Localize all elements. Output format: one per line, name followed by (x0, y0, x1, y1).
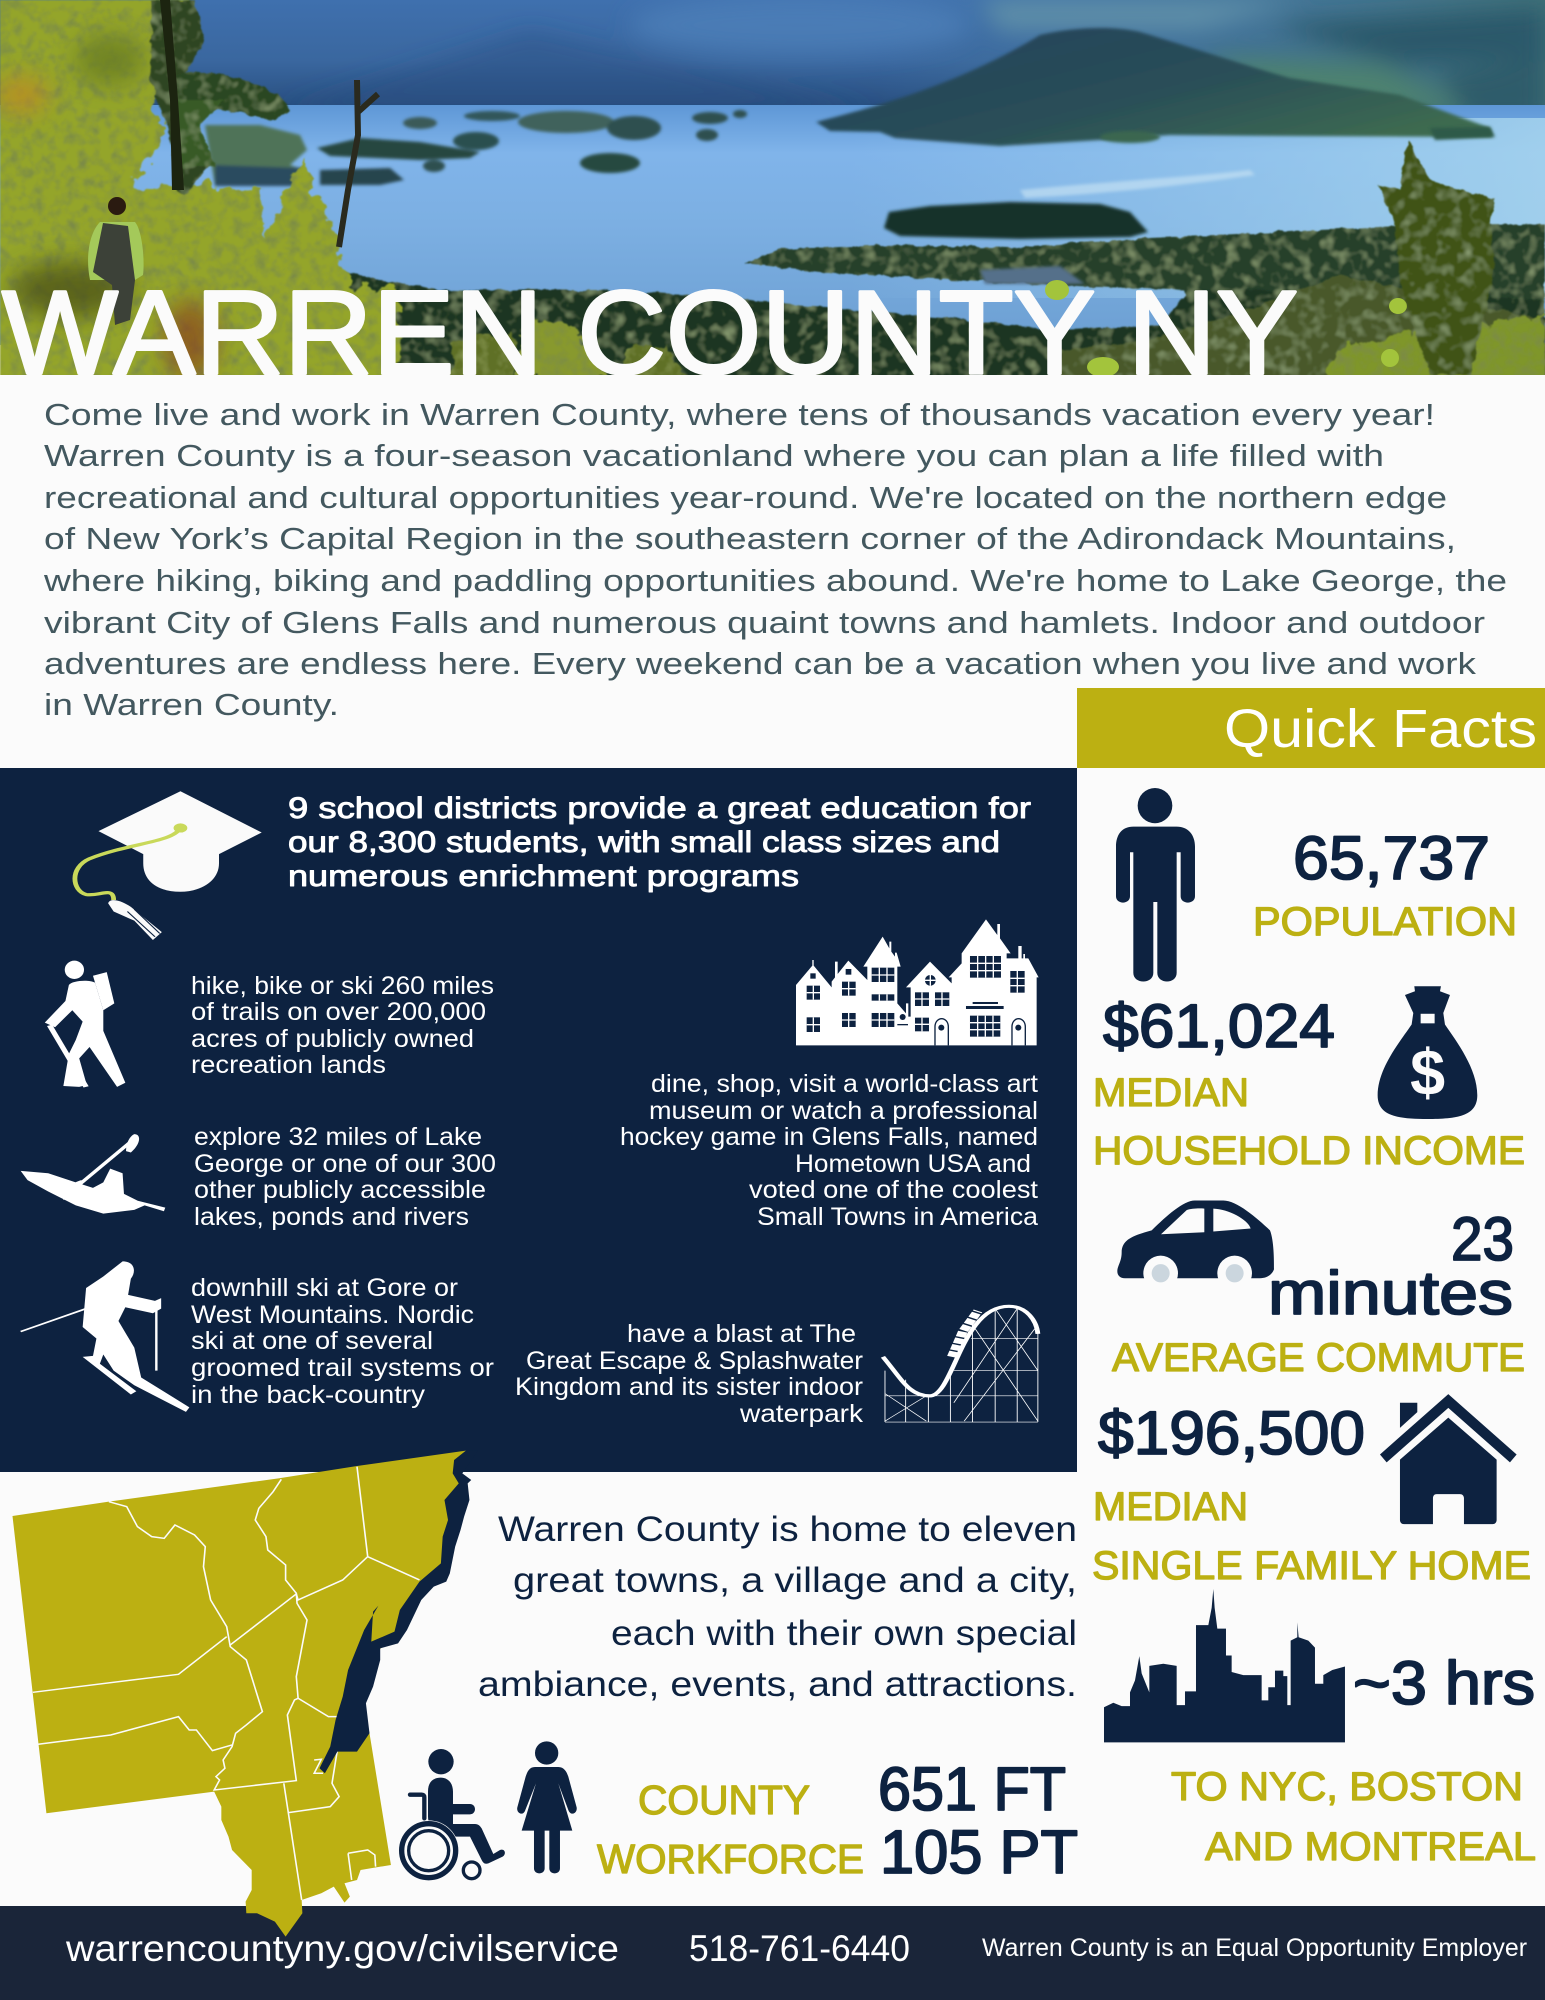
hiking text: recreation lands (191, 1051, 386, 1079)
hero photo: lake and mountains (0, 0, 1545, 400)
towns text: Warren County is home to eleven (498, 1510, 1077, 1549)
education text: 9 school districts provide a great education for (288, 792, 1031, 825)
map lake george and east border (320, 1450, 478, 1773)
towns text (478, 1510, 1077, 1704)
skiing text: ski at one of several (191, 1327, 433, 1355)
income label: MEDIAN (1093, 1071, 1249, 1115)
commute stat: 23 (1451, 1205, 1514, 1273)
kayak text: George or one of our 300 (194, 1150, 496, 1178)
dead tree (339, 80, 378, 247)
lake islands (205, 110, 1495, 186)
commute stat: minutes (1268, 1259, 1513, 1327)
pine island (884, 202, 1148, 239)
icon: hiker (45, 961, 125, 1087)
workforce numbers: 105 PT (880, 1818, 1078, 1886)
intro paragraph (43, 397, 1507, 722)
hiker in photo (88, 197, 144, 325)
autumn right hillside (1061, 274, 1545, 375)
education text (288, 792, 1031, 893)
county workforce label (597, 1777, 864, 1882)
hiking text: hike, bike or ski 260 miles (191, 972, 494, 1000)
workforce numbers: 651 FT (878, 1755, 1066, 1823)
great escape text (515, 1320, 864, 1428)
kayak text: other publicly accessible (194, 1176, 486, 1204)
glens falls text: hockey game in Glens Falls, named (620, 1123, 1038, 1151)
map of Warren County (12, 1450, 478, 1937)
great escape text: have a blast at The (627, 1320, 856, 1348)
home price stat: $196,500 (1098, 1399, 1365, 1467)
icon: woman (517, 1741, 577, 1873)
kayak text: explore 32 miles of Lake (194, 1123, 482, 1151)
kayak text: lakes, ponds and rivers (194, 1203, 469, 1231)
icon: house (1380, 1394, 1517, 1524)
glens falls text: dine, shop, visit a world-class art (651, 1070, 1038, 1098)
glens falls text: voted one of the coolest (749, 1176, 1038, 1204)
home price label: SINGLE FAMILY HOME (1092, 1544, 1531, 1588)
great escape text: Kingdom and its sister indoor (515, 1373, 863, 1401)
intro paragraph: Come live and work in Warren County, where tens of thousands vacation every year! (44, 397, 1435, 432)
icon: roller coaster (883, 1306, 1038, 1422)
income label: HOUSEHOLD INCOME (1093, 1129, 1525, 1173)
distance label: AND MONTREAL (1205, 1825, 1536, 1869)
footer phone: 518-761-6440 (689, 1928, 910, 1969)
icon: skier (21, 1261, 189, 1412)
county workforce label: COUNTY (638, 1777, 810, 1823)
icon: graduation cap (75, 791, 262, 940)
forested foreground (346, 272, 1545, 375)
kayak text (194, 1123, 496, 1231)
distance label: TO NYC, BOSTON (1171, 1765, 1523, 1809)
icon: city skyline (1104, 1589, 1345, 1742)
skiing text: groomed trail systems or (191, 1354, 494, 1382)
intro paragraph: where hiking, biking and paddling opportunities abound. We're home to Lake George, the (43, 563, 1507, 598)
title: WARREN COUNTY NY (2, 266, 1298, 400)
county workforce label: WORKFORCE (597, 1836, 864, 1882)
bright leaves (1045, 280, 1407, 377)
intro paragraph: recreational and cultural opportunities year-round. We're located on the northern edge (44, 480, 1447, 515)
income stat: $61,024 (1103, 992, 1335, 1060)
panel: navy activities (0, 768, 1077, 1472)
skiing text: downhill ski at Gore or (191, 1274, 458, 1302)
distance label (1171, 1765, 1536, 1869)
glens falls text (620, 1070, 1038, 1231)
home price label: MEDIAN (1093, 1485, 1248, 1529)
great escape text: waterpark (739, 1400, 864, 1428)
intro paragraph: of New York’s Capital Region in the southeastern corner of the Adirondack Mountains, (44, 521, 1456, 556)
intro paragraph: in Warren County. (44, 687, 339, 722)
mountain hill (816, 28, 1492, 146)
map town boundaries (33, 1467, 419, 1900)
footer equal opportunity note: Warren County is an Equal Opportunity Employer (982, 1934, 1527, 1962)
icon: car (1117, 1201, 1274, 1291)
population label: POPULATION (1253, 900, 1517, 944)
skiing text: West Mountains. Nordic (191, 1301, 474, 1329)
quick facts header: Quick Facts (1224, 699, 1537, 759)
right pine tree (1378, 140, 1495, 375)
hiking text: of trails on over 200,000 (191, 998, 486, 1026)
icon: person (1116, 788, 1195, 981)
icon: wheelchair user (398, 1749, 505, 1881)
intro paragraph: adventures are endless here. Every weekend can be a vacation when you live and work (44, 646, 1477, 681)
hiking text (191, 972, 494, 1079)
icon: town buildings (796, 919, 1039, 1045)
towns text: great towns, a village and a city, (513, 1561, 1077, 1600)
population stat: 65,737 (1293, 824, 1490, 892)
distance stat: ~3 hrs (1353, 1649, 1535, 1717)
left foliage (0, 0, 405, 400)
education text: numerous enrichment programs (288, 860, 799, 893)
hiking text: acres of publicly owned (191, 1025, 474, 1053)
water streak (1020, 170, 1255, 198)
glens falls text: museum or watch a professional (649, 1097, 1038, 1125)
skiing text: in the back-country (191, 1381, 426, 1409)
education text: our 8,300 students, with small class sizes and (288, 826, 1000, 859)
footer website: warrencountyny.gov/civilservice (65, 1928, 619, 1969)
intro paragraph: Warren County is a four-season vacationland where you can plan a life filled with (44, 438, 1384, 473)
intro paragraph: vibrant City of Glens Falls and numerous quaint towns and hamlets. Indoor and outdoor (44, 605, 1485, 640)
towns text: ambiance, events, and attractions. (478, 1665, 1077, 1704)
icon: money bag (1378, 986, 1477, 1119)
distant ridges (422, 0, 1545, 105)
footer bar (0, 1906, 1545, 2000)
wooded peninsula (745, 224, 1545, 320)
icon: kayaker (21, 1134, 165, 1214)
skiing text (191, 1274, 494, 1409)
home price label (1092, 1485, 1531, 1588)
great escape text: Great Escape & Splashwater (526, 1347, 863, 1375)
glens falls text: Small Towns in America (757, 1203, 1038, 1231)
quick facts header (1077, 688, 1545, 768)
towns text: each with their own special (611, 1614, 1077, 1653)
income label (1093, 1071, 1525, 1173)
workforce numbers (878, 1755, 1078, 1886)
commute stat (1268, 1205, 1514, 1327)
pine tree left (150, 0, 290, 195)
yellow shrubs foreground (514, 318, 608, 375)
commute label: AVERAGE COMMUTE (1112, 1336, 1525, 1380)
glens falls text: Hometown USA and (795, 1150, 1031, 1178)
icon: money bag: $ (1410, 1036, 1445, 1108)
